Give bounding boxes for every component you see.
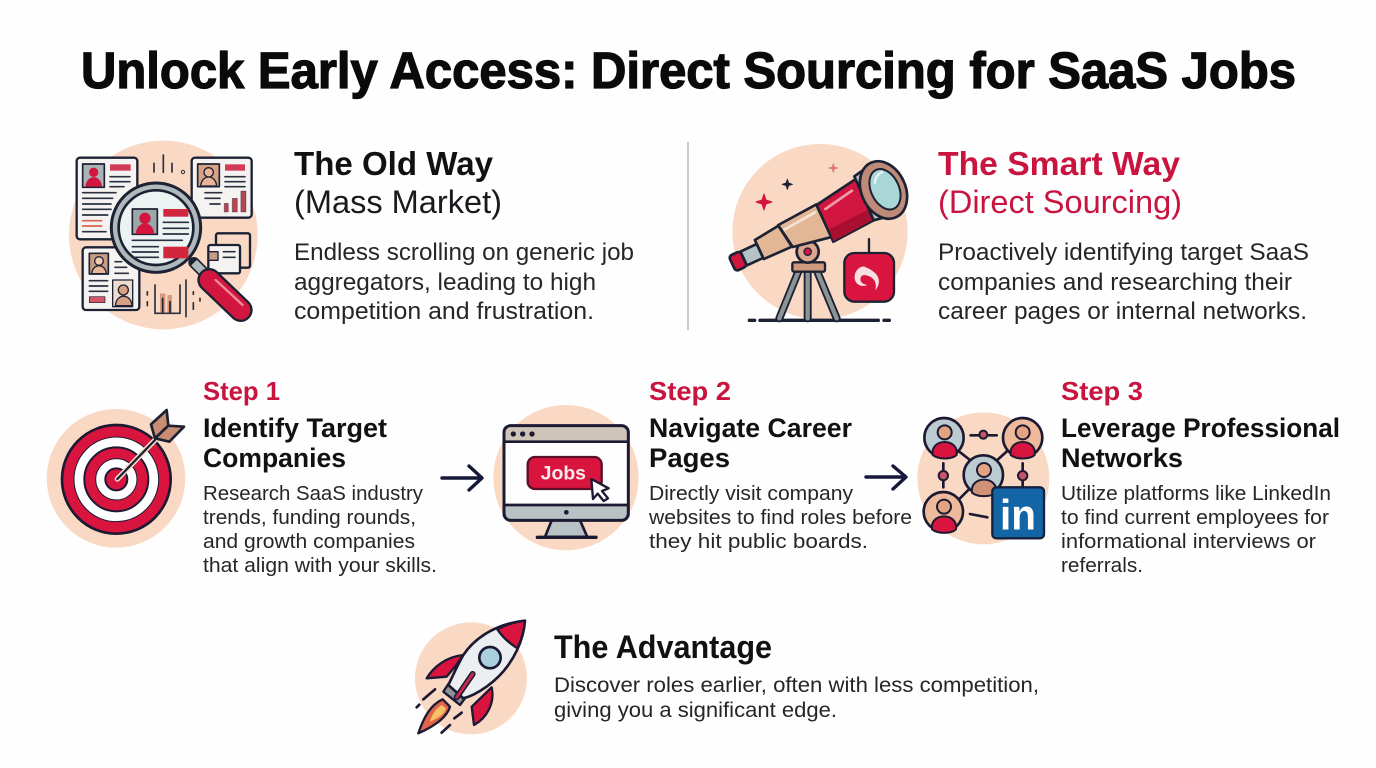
text block: advantage description: Discover roles earlier, often with less competition,: [554, 674, 1039, 697]
arrow: step 2 to step 3: [866, 466, 906, 489]
subheading: direct sourcing: (Direct Sourcing): [938, 184, 1182, 220]
panel: the old way: [69, 141, 634, 329]
step 2 description: websites to find roles before: [648, 507, 912, 529]
text block: smart way description: career pages or internal networks.: [938, 298, 1307, 325]
step 3 description: to find current employees for: [1061, 507, 1329, 529]
icon: monitor with jobs button: [493, 405, 639, 550]
heading: the smart way: The Smart Way: [938, 145, 1181, 182]
text block: advantage description: giving you a significant edge.: [554, 699, 837, 722]
panel: step 1: [47, 376, 437, 577]
panel: step 2: [493, 376, 912, 553]
heading: the advantage: The Advantage: [554, 629, 772, 665]
step 1 description: [203, 483, 437, 577]
step 1 description: that align with your skills.: [203, 555, 437, 577]
step 3 description: referrals.: [1061, 555, 1143, 577]
arrow: step 1 to step 2: [442, 466, 482, 490]
step 2 heading: [649, 413, 853, 473]
step 3 description: informational interviews or: [1061, 531, 1316, 553]
step 3 heading: Leverage Professional: [1061, 413, 1340, 443]
text block: advantage description: [554, 674, 1039, 722]
step 1 description: trends, funding rounds,: [203, 507, 416, 529]
step 1 heading: Identify Target: [203, 413, 387, 443]
step 3 label: Step 3: [1061, 376, 1143, 406]
icon: telescope: [718, 144, 916, 320]
text block: smart way description: companies and researching their: [938, 269, 1292, 296]
step 2 heading: Navigate Career: [649, 413, 853, 443]
panel: the advantage: [415, 621, 1039, 734]
icon: target with arrow: [47, 409, 185, 548]
step 1 description: and growth companies: [203, 531, 415, 553]
icon: magnifying glass over resumes: [69, 141, 258, 329]
icon: rocket: [415, 621, 527, 734]
step 3 description: Utilize platforms like LinkedIn: [1061, 483, 1331, 505]
heading: the old way: The Old Way: [294, 145, 494, 182]
title: Unlock Early Access: Direct Sourcing for SaaS Jobs: [81, 42, 1296, 99]
icon: professional network with linkedin badge: [917, 412, 1049, 544]
step 2 description: they hit public boards.: [649, 531, 868, 553]
icon: professional network with linkedin badge: in: [1000, 491, 1036, 539]
panel: the smart way: [718, 144, 1309, 325]
text block: old way description: [294, 239, 634, 325]
text block: smart way description: Proactively identifying target SaaS: [938, 239, 1309, 266]
text block: old way description: Endless scrolling on generic job: [294, 239, 634, 266]
step 1 description: Research SaaS industry: [203, 483, 424, 505]
text block: old way description: competition and frustration.: [294, 298, 594, 325]
step 2 description: [648, 483, 912, 553]
text block: smart way description: [938, 239, 1309, 325]
step 3 description: [1061, 483, 1331, 577]
panel: step 3: [917, 376, 1340, 577]
icon: monitor with jobs button: Jobs: [541, 464, 586, 485]
step 2 label: Step 2: [649, 376, 731, 406]
step 3 heading: [1061, 413, 1340, 473]
step 1 label: Step 1: [203, 376, 280, 406]
step 1 heading: [203, 413, 387, 473]
step 1 heading: Companies: [203, 443, 346, 473]
step 2 description: Directly visit company: [649, 483, 854, 505]
step 3 heading: Networks: [1061, 443, 1183, 473]
step 2 heading: Pages: [649, 443, 730, 473]
subheading: mass market: (Mass Market): [294, 184, 502, 220]
text block: old way description: aggregators, leading to high: [294, 269, 596, 296]
